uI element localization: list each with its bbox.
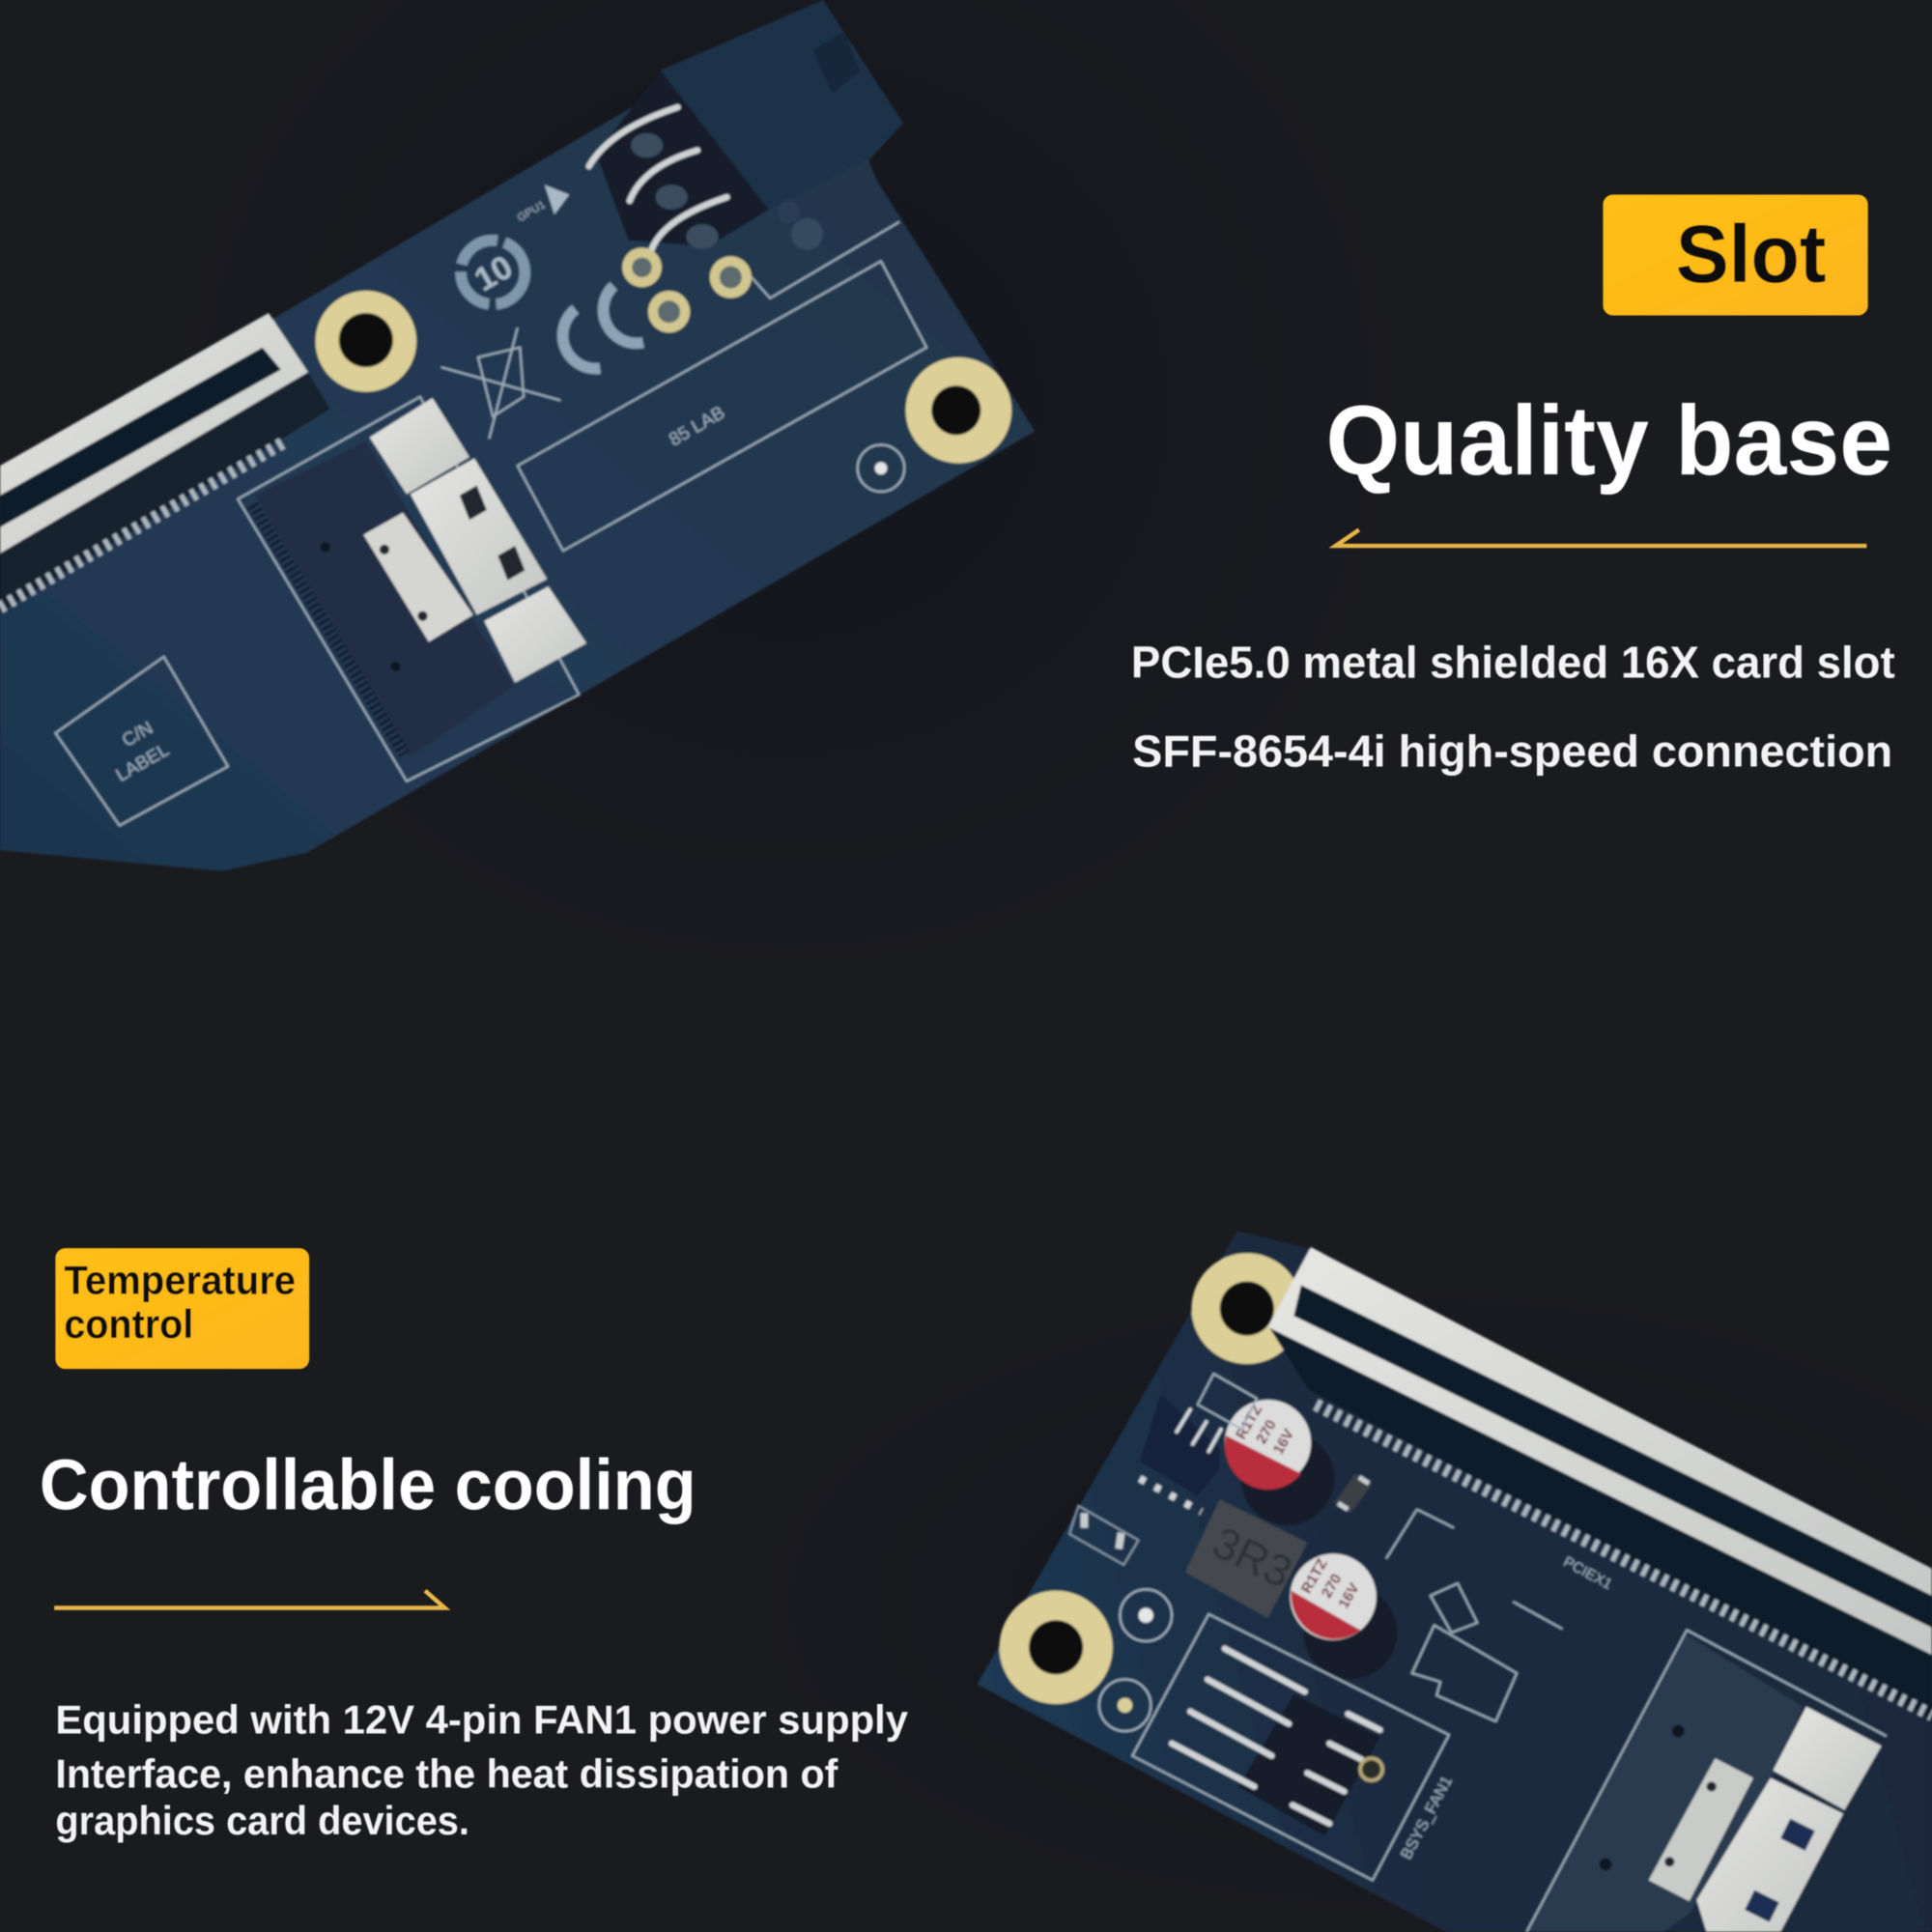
capacitor upper: 270 (1253, 1417, 1280, 1447)
SFF-8654 connector (1526, 1631, 1887, 1932)
heading: Controllable cooling: Controllable cooling (40, 1444, 696, 1524)
silkscreen component blocks (1198, 1374, 1615, 1721)
fan header (1132, 1614, 1456, 1880)
icon: crossed bin (441, 327, 560, 439)
fan header: BSYS_FAN1 (1397, 1773, 1456, 1862)
capacitor upper (1225, 1400, 1334, 1525)
text: cooling description: Interface, enhance the heat dissipation of (55, 1751, 838, 1797)
mounting hole bottom (999, 1591, 1113, 1704)
mounting hole top (1191, 1253, 1302, 1364)
photo: bottom circuit board (977, 1231, 1932, 1932)
icon: recycle 10: 10 (469, 248, 519, 298)
board body (0, 0, 1035, 871)
text: slot features: SFF-8654-4i high-speed connection (1132, 725, 1892, 776)
outlined label: C/N (55, 657, 228, 826)
badge: Temperature control: control (64, 1301, 193, 1347)
outlined label: C/N: LABEL (113, 740, 173, 786)
board body (977, 1231, 1932, 1932)
capacitor lower: 16V (1335, 1579, 1363, 1611)
small capacitor C4 (1069, 1506, 1139, 1565)
small SMD part (1334, 1474, 1373, 1513)
chip leads (1177, 1409, 1221, 1452)
solder pads (622, 247, 752, 332)
icon: CE mark (563, 286, 643, 369)
text: slot features: PCIe5.0 metal shielded 16X card slot (1131, 638, 1895, 688)
capacitor lower: R1TZ (1298, 1556, 1331, 1596)
connector pins (589, 107, 727, 252)
chip (1140, 1394, 1220, 1495)
PCIe slot (1267, 1247, 1932, 1719)
panel: slot heading block (1131, 195, 1895, 776)
inductor 3R3: 3R3 (1205, 1517, 1300, 1598)
dark area behind connector pins (596, 71, 769, 246)
capacitor lower (1290, 1553, 1397, 1680)
text: cooling description: graphics card devices. (55, 1798, 469, 1843)
outlined label: 85 LAB: 85 LAB (666, 403, 728, 450)
photo: top circuit board (0, 0, 1035, 871)
badge: Slot: Slot (1676, 209, 1826, 299)
silkscreen component blocks: PCIEX1 (1560, 1553, 1615, 1593)
SFF-8654 connector (238, 397, 586, 781)
test point (858, 444, 904, 492)
panel: temperature control block (40, 1248, 909, 1843)
mounting hole right (906, 357, 1011, 464)
arrow: left (1336, 529, 1866, 546)
badge: Slot (1603, 195, 1868, 316)
test points (1099, 1589, 1172, 1731)
outlined label: 85 LAB (518, 222, 926, 551)
diode marker: GPU1 (516, 199, 548, 224)
badge: Temperature control (55, 1248, 309, 1369)
PCIe slot (0, 313, 330, 612)
mounting hole left (316, 291, 416, 392)
capacitor upper: R1TZ (1233, 1402, 1265, 1442)
heading: Quality base: Quality base (1325, 385, 1892, 496)
fan connector housing (661, 0, 900, 250)
SMD pad row (1140, 1479, 1202, 1512)
text: slot features (1131, 638, 1895, 776)
icon: recycle 10 (461, 241, 525, 304)
text: cooling description: Equipped with 12V 4-pin FAN1 power supply (55, 1697, 909, 1743)
outlined label: C/N: C/N (119, 718, 156, 752)
arrow: right (54, 1591, 444, 1608)
capacitor upper: 16V (1270, 1426, 1298, 1458)
text: cooling description (55, 1697, 909, 1843)
diode marker (516, 185, 569, 224)
badge: Temperature control: Temperature (64, 1257, 296, 1302)
capacitor lower: 270 (1319, 1572, 1345, 1601)
inductor 3R3 (1185, 1499, 1307, 1618)
